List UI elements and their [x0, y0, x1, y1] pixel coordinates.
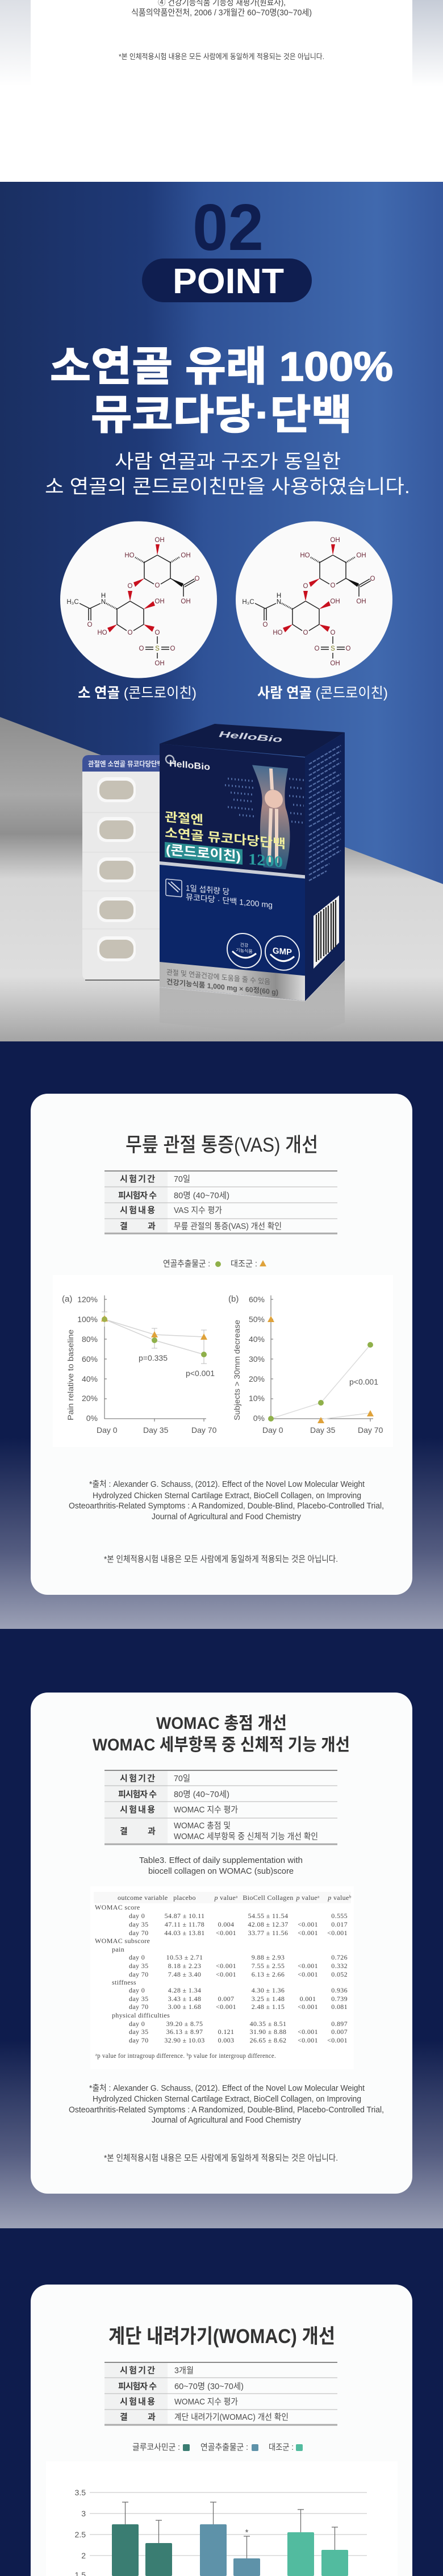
table: WOMAC scores: stiffness	[112, 1978, 136, 1986]
table: trial summary	[105, 2362, 337, 2425]
table: trial summary: 70일	[174, 1174, 190, 1184]
table: WOMAC scores: 10.53 ± 2.71	[166, 1953, 203, 1961]
product: blister pack	[82, 755, 168, 981]
table: trial summary: WOMAC 지수 평가	[174, 2397, 238, 2407]
table: WOMAC scores: ᵃp value for intragroup difference. ᵇp value for intergroup difference.	[95, 2052, 276, 2060]
table: WOMAC scores: p valueᵃ	[295, 1894, 320, 1902]
icon: human cartilage molecule: OH	[330, 598, 340, 605]
legend	[163, 1259, 266, 1269]
table: WOMAC scores: day 70	[129, 1970, 148, 1978]
table: WOMAC scores: 3.43 ± 1.48	[168, 1995, 201, 2003]
table: WOMAC scores: 4.28 ± 1.34	[168, 1986, 201, 1994]
chart a: pain relative to baseline: (a)	[62, 1294, 72, 1304]
chart b: subjects with decrease: 20%	[249, 1374, 265, 1383]
table: trial summary: WOMAC 세부항목 중 신체적 기능 개선 확인	[174, 1832, 318, 1841]
table: WOMAC scores: 4.30 ± 1.36	[252, 1986, 285, 1994]
chart a: pain relative to baseline: Pain relative to baseline	[66, 1329, 75, 1420]
table: WOMAC scores: day 35	[129, 1995, 148, 2003]
text block: source: Hydrolyzed Chicken Sternal Cartilage Extract, BioCell Collagen, on Improving	[93, 1491, 361, 1500]
panel: point 02 blue section	[0, 182, 443, 1041]
logo	[166, 755, 210, 772]
table: WOMAC scores: 0.004	[218, 1920, 234, 1928]
table: trial summary: 피시험자 수	[118, 1191, 157, 1201]
chart a: pain relative to baseline: Day 70	[191, 1425, 217, 1435]
icon: cow cartilage molecule: OH	[154, 660, 165, 667]
table: trial summary: 결과	[120, 1827, 156, 1836]
icon: cow cartilage molecule: O	[139, 645, 144, 652]
icon: cow cartilage molecule: O	[195, 576, 200, 582]
panel: WOMAC total section	[0, 1629, 443, 2228]
dosage info	[166, 879, 273, 910]
chart a: pain relative to baseline: p<0.001	[186, 1369, 215, 1378]
table: trial summary: 결과	[120, 1222, 156, 1231]
icon: human cartilage molecule	[236, 522, 392, 678]
text block: source: Hydrolyzed Chicken Sternal Cartilage Extract, BioCell Collagen, on Improving	[93, 2094, 361, 2104]
table: WOMAC scores: 36.13 ± 8.97	[166, 2028, 203, 2036]
bar chart: 3	[81, 2509, 86, 2518]
chart a: pain relative to baseline: Day 35	[143, 1425, 169, 1435]
badges: 기능식품	[236, 948, 253, 954]
icon: human cartilage molecule: O	[263, 622, 268, 628]
table: WOMAC scores: <0.001	[298, 2028, 318, 2036]
bar chart: 2.5	[75, 2530, 86, 2539]
legend: 대조군 :	[231, 1259, 257, 1269]
table: WOMAC scores: <0.001	[298, 1970, 318, 1978]
table: WOMAC scores: <0.001	[216, 1970, 236, 1978]
badge: POINT pill	[142, 259, 312, 302]
table: WOMAC scores	[90, 1886, 354, 2069]
bar chart: *	[245, 2528, 249, 2537]
chart b: subjects with decrease: 30%	[249, 1354, 265, 1364]
table: WOMAC scores: <0.001	[298, 2003, 318, 2011]
text: table caption: biocell collagen on WOMAC (sub)score	[148, 1866, 294, 1876]
table: WOMAC scores: day 0	[129, 1953, 145, 1961]
table: WOMAC scores: BioCell Collagen	[243, 1894, 294, 1902]
legend: 연골추출물군 :	[200, 2442, 248, 2452]
table: trial summary: WOMAC 총점 및	[174, 1821, 231, 1831]
table: trial summary: 시 험 내 용	[120, 1206, 155, 1215]
table: WOMAC scores: day 70	[129, 2036, 148, 2044]
table: WOMAC scores: day 70	[129, 1929, 148, 1937]
icon: human cartilage molecule: OH	[330, 660, 340, 667]
icon: cow cartilage molecule: H	[101, 593, 106, 599]
text block: subtitle: 소 연골의 콘드로이친만을 사용하였습니다.	[45, 476, 410, 498]
table: trial summary: 80명 (40~70세)	[174, 1790, 229, 1799]
product: supplement box	[160, 724, 345, 1001]
badges: GMP	[273, 946, 292, 957]
table: WOMAC scores: day 0	[129, 1986, 145, 1994]
icon: human cartilage molecule: S	[331, 645, 335, 652]
chart a: pain relative to baseline	[62, 1294, 217, 1435]
table: WOMAC scores: 2.48 ± 1.15	[252, 2003, 285, 2011]
table: WOMAC scores: WOMAC score	[95, 1903, 140, 1911]
icon: human cartilage molecule: O	[315, 645, 320, 652]
table: trial summary: 70일	[174, 1774, 190, 1783]
chart a: pain relative to baseline: 80%	[82, 1335, 98, 1344]
icon: human cartilage molecule: O	[331, 582, 336, 589]
icon: human cartilage molecule: OH	[356, 552, 366, 559]
icon: cow cartilage molecule: OH	[154, 537, 165, 544]
logo: HelloBio	[169, 758, 210, 772]
table: WOMAC scores: day 70	[129, 2003, 148, 2011]
heading: main title	[50, 344, 393, 438]
icon: cow cartilage molecule: N	[101, 599, 106, 606]
text block: source	[69, 1479, 384, 1522]
table: WOMAC scores: p valueᵃ	[214, 1894, 238, 1902]
chart b: subjects with decrease: 60%	[249, 1295, 265, 1304]
table: WOMAC scores: WOMAC subscore	[95, 1937, 150, 1945]
icon: cow cartilage molecule: HO	[97, 630, 107, 636]
heading: main title: 소연골 유래 100%	[50, 344, 393, 390]
table: WOMAC scores: 33.77 ± 11.56	[248, 1929, 288, 1937]
table: trial summary: 시 험 기 간	[120, 2366, 155, 2375]
table: trial summary	[105, 1770, 337, 1844]
icon: cow cartilage molecule: O	[128, 630, 133, 636]
floor	[0, 717, 443, 1041]
label: human cartilage: 사람 연골 (콘드로이친)	[257, 685, 388, 701]
badge: POINT pill: POINT	[173, 262, 284, 301]
panel: top clinical card remainder	[0, 0, 443, 86]
table: trial summary: 시 험 기 간	[120, 1174, 155, 1184]
table: WOMAC scores: pain	[112, 1945, 124, 1953]
product name: (콘드로이친)	[166, 842, 241, 864]
table: WOMAC scores: 0.726	[331, 1953, 348, 1961]
text block: source: *출처 : Alexander G. Schauss, (2012). Effect of the Novel Low Molecular Weight	[89, 2083, 365, 2093]
icon: human cartilage molecule: O	[331, 630, 336, 636]
table: trial summary: 무릎 관절의 통증(VAS) 개선 확인	[174, 1222, 282, 1231]
table: WOMAC scores: day 35	[129, 2028, 148, 2036]
table: WOMAC scores: 0.936	[331, 1986, 348, 1994]
table: WOMAC scores: 47.11 ± 11.78	[165, 1920, 204, 1928]
table: WOMAC scores: 0.739	[331, 1995, 348, 2003]
table: WOMAC scores: 3.00 ± 1.68	[168, 2003, 201, 2011]
icon: cow cartilage molecule: O	[155, 630, 160, 636]
table: WOMAC scores: <0.001	[298, 1929, 318, 1937]
icon: human cartilage molecule: H₃C	[242, 599, 254, 606]
chart a: pain relative to baseline: 100%	[77, 1315, 98, 1324]
icon: cow cartilage molecule: OH	[181, 552, 191, 559]
text block: source: Osteoarthritis-Related Symptoms : A Randomized, Double-Blind, Placebo-Controlled Trial,	[69, 1501, 384, 1511]
chart a: pain relative to baseline: 120%	[77, 1295, 98, 1304]
table: WOMAC scores: 8.18 ± 2.23	[168, 1962, 201, 1970]
product name	[165, 810, 286, 872]
badges	[227, 931, 299, 973]
table: trial summary: WOMAC 지수 평가	[174, 1805, 238, 1815]
table: WOMAC scores: outcome variable	[118, 1894, 168, 1902]
note: disclaimer: *본 인체적용시험 내용은 모든 사람에게 동일하게 적용되는 것은 아닙니다.	[104, 1554, 338, 1564]
table: WOMAC scores: day 35	[129, 1962, 148, 1970]
bottom strip text	[166, 968, 278, 997]
icon: human cartilage molecule: HO	[273, 630, 283, 636]
table: WOMAC scores: <0.001	[216, 1962, 236, 1970]
product name: 관절엔	[165, 810, 203, 827]
table: WOMAC scores: p valueᵇ	[327, 1894, 352, 1902]
box top face: HelloBio	[219, 730, 283, 745]
bottom strip text: 관절 및 연골건강에 도움을 줄 수 있음	[166, 968, 270, 986]
dot pattern	[225, 773, 304, 823]
table: WOMAC scores: 40.35 ± 8.51	[250, 2020, 286, 2028]
table: WOMAC scores: day 0	[129, 2020, 145, 2028]
label: cow cartilage: 소 연골 (콘드로이친)	[78, 685, 197, 701]
icon: cow cartilage molecule: O	[87, 622, 93, 628]
table: WOMAC scores: 54.87 ± 10.11	[165, 1912, 204, 1920]
table: trial summary: 계단 내려가기(WOMAC) 개선 확인	[174, 2412, 289, 2422]
table: WOMAC scores: 6.13 ± 2.66	[252, 1970, 285, 1978]
table: WOMAC scores: 39.20 ± 8.75	[166, 2020, 203, 2028]
table: WOMAC scores: 3.25 ± 1.48	[252, 1995, 285, 2003]
table: WOMAC scores: <0.001	[327, 1929, 348, 1937]
text block: source	[69, 2083, 384, 2125]
heading: 무릎 관절 통증(VAS) 개선	[126, 1134, 318, 1156]
bottom strip text: 건강기능식품 1,000 mg × 60정(60 g)	[166, 978, 278, 997]
text block: trial reference: 식품의약품안전처, 2006 / 3개월간 60~70명(30~70세)	[131, 8, 312, 18]
icon: human cartilage molecule: HO	[300, 552, 310, 559]
icon: human cartilage molecule: O	[370, 576, 375, 582]
table: WOMAC scores: placebo	[173, 1894, 196, 1902]
chart b: subjects with decrease: Subjects > 30mm decrease	[232, 1320, 241, 1420]
heading	[93, 1714, 350, 1754]
knee illustration	[252, 765, 290, 870]
icon: human cartilage molecule: O	[303, 630, 308, 636]
chart a: pain relative to baseline: 40%	[82, 1374, 98, 1383]
table: WOMAC scores: 0.017	[331, 1920, 348, 1928]
legend: 연골추출물군 :	[163, 1259, 210, 1269]
table: WOMAC scores: 0.052	[331, 1970, 348, 1978]
table: WOMAC scores: 0.001	[300, 1995, 316, 2003]
panel: VAS section	[0, 1041, 443, 1629]
icon: human cartilage molecule: O	[303, 583, 308, 590]
legend: 글루코사민군 :	[132, 2442, 180, 2452]
icon: human cartilage molecule: OH	[356, 598, 366, 605]
table: WOMAC scores: 0.007	[218, 1995, 234, 2003]
product: blister pack: 관절엔 소연골 뮤코다당단백	[88, 760, 163, 768]
table: trial summary: 시 험 기 간	[120, 1774, 155, 1783]
chart a: pain relative to baseline: p=0.335	[139, 1353, 168, 1362]
table: trial summary: 시 험 내 용	[120, 1805, 155, 1815]
chart b: subjects with decrease: 50%	[249, 1315, 265, 1324]
text block: subtitle: 사람 연골과 구조가 동일한	[115, 451, 341, 473]
table: WOMAC scores: <0.001	[216, 1929, 236, 1937]
heading: main title: 뮤코다당·단백	[91, 393, 352, 438]
chart b: subjects with decrease: Day 0	[262, 1425, 283, 1435]
table: WOMAC scores: 26.65 ± 8.62	[250, 2036, 286, 2044]
table: trial summary: VAS 지수 평가	[174, 1206, 222, 1215]
table: WOMAC scores: 7.55 ± 2.55	[252, 1962, 285, 1970]
table: WOMAC scores: 0.007	[331, 2028, 348, 2036]
product name: 1200	[248, 851, 283, 872]
chart a: pain relative to baseline: Day 0	[97, 1425, 118, 1435]
table: WOMAC scores: 0.555	[331, 1912, 348, 1920]
table: trial summary: 3개월	[174, 2366, 194, 2375]
product: box reflection	[160, 961, 345, 1037]
icon: cow cartilage molecule: S	[155, 645, 160, 652]
table: WOMAC scores: 0.897	[331, 2020, 348, 2028]
box side face	[305, 732, 345, 1001]
chart b: subjects with decrease: 40%	[249, 1335, 265, 1344]
chart b: subjects with decrease: 0%	[253, 1414, 265, 1423]
heading: WOMAC 세부항목 중 신체적 기능 개선	[93, 1736, 350, 1754]
icon: cow cartilage molecule: H₃C	[66, 599, 79, 606]
table: WOMAC scores: 7.48 ± 3.40	[168, 1970, 201, 1978]
chart b: subjects with decrease	[228, 1294, 383, 1435]
table: WOMAC scores: 0.081	[331, 2003, 348, 2011]
table: trial summary: 시 험 내 용	[120, 2397, 155, 2407]
chart a: pain relative to baseline: 0%	[86, 1414, 98, 1423]
bar chart	[46, 2461, 398, 2576]
table: WOMAC scores: day 35	[129, 1920, 148, 1928]
icon: cow cartilage molecule: HO	[124, 552, 135, 559]
number 02: 02	[193, 190, 264, 264]
icon: human cartilage molecule: O	[346, 645, 351, 652]
heading: WOMAC 총점 개선	[156, 1714, 287, 1733]
table: WOMAC scores: 32.90 ± 10.03	[164, 2036, 205, 2044]
table: WOMAC scores: day 0	[129, 1912, 145, 1920]
table: WOMAC scores: 0.332	[331, 1962, 348, 1970]
table: trial summary: 피시험자 수	[118, 1790, 157, 1799]
chart b: subjects with decrease: (b)	[228, 1294, 239, 1304]
text block: source: *출처 : Alexander G. Schauss, (2012). Effect of the Novel Low Molecular Weight	[89, 1479, 365, 1489]
table: trial summary: 80명 (40~70세)	[174, 1191, 229, 1201]
icon: cow cartilage molecule: O	[128, 583, 133, 590]
table: WOMAC scores: 0.003	[218, 2036, 234, 2044]
table: WOMAC scores: <0.001	[327, 2036, 348, 2044]
text: table caption: Table3. Effect of daily supplementation with	[139, 1856, 303, 1865]
text block: source: Osteoarthritis-Related Symptoms : A Randomized, Double-Blind, Placebo-Controlled Trial,	[69, 2105, 384, 2115]
icon: human cartilage molecule: H	[277, 593, 281, 599]
table: trial summary: 결과	[120, 2412, 156, 2422]
table: WOMAC scores: 44.03 ± 13.81	[164, 1929, 205, 1937]
chart b: subjects with decrease: p<0.001	[349, 1377, 378, 1386]
text block: source: Journal of Agricultural and Food Chemistry	[152, 1512, 301, 1522]
heading: 계단 내려가기(WOMAC) 개선	[108, 2325, 335, 2348]
note: disclaimer: *본 인체적용시험 내용은 모든 사람에게 동일하게 적용되는 것은 아닙니다.	[119, 52, 324, 61]
dosage info: 1일 섭취량 당	[186, 883, 229, 897]
icon: human cartilage molecule: OH	[330, 537, 340, 544]
chart a: pain relative to baseline: 60%	[82, 1354, 98, 1364]
icon: cow cartilage molecule: OH	[154, 598, 165, 605]
table: WOMAC scores: 54.55 ± 11.54	[248, 1912, 288, 1920]
table: WOMAC scores: <0.001	[298, 1920, 318, 1928]
table: trial summary: 피시험자 수	[118, 2382, 157, 2391]
box front face	[160, 744, 305, 1001]
text block: subtitle	[45, 451, 410, 498]
icon: cow cartilage molecule: OH	[181, 598, 191, 605]
badges: 건강	[240, 941, 249, 948]
icon: cow cartilage molecule	[60, 522, 217, 678]
table: trial summary: 60~70명 (30~70세)	[174, 2382, 244, 2391]
table: WOMAC scores: physical difficulties	[112, 2011, 170, 2019]
table: WOMAC scores: 31.90 ± 8.88	[250, 2028, 286, 2036]
legend: 대조군 :	[269, 2442, 294, 2452]
text block: source: Journal of Agricultural and Food Chemistry	[152, 2115, 301, 2125]
icon: cow cartilage molecule: O	[170, 645, 175, 652]
table: trial summary	[105, 1171, 337, 1233]
icon: cow cartilage molecule: O	[155, 582, 160, 589]
table: WOMAC scores: 9.88 ± 2.93	[252, 1953, 285, 1961]
chart a: pain relative to baseline: 20%	[82, 1394, 98, 1403]
legend	[132, 2442, 303, 2452]
bar chart: 3.5	[75, 2488, 86, 2497]
icon: human cartilage molecule: N	[277, 599, 281, 606]
table: WOMAC scores: <0.001	[298, 1962, 318, 1970]
table: WOMAC scores: 42.08 ± 12.37	[248, 1920, 289, 1928]
chart panel	[53, 1275, 393, 1447]
table: WOMAC scores: <0.001	[216, 2003, 236, 2011]
table: WOMAC scores: <0.001	[298, 2036, 318, 2044]
bar chart: 2	[81, 2551, 86, 2560]
box top face	[160, 724, 345, 757]
product name: 소연골 뮤코다당단백	[165, 826, 286, 851]
chart b: subjects with decrease: 10%	[249, 1394, 265, 1403]
note: disclaimer: *본 인체적용시험 내용은 모든 사람에게 동일하게 적용되는 것은 아닙니다.	[104, 2153, 338, 2163]
text block: trial reference	[131, 0, 312, 18]
text: table caption	[139, 1856, 303, 1876]
panel: stair descent section	[0, 2228, 443, 2576]
table: WOMAC scores: 0.121	[218, 2028, 234, 2036]
dosage info: 뮤코다당 · 단백 1,200 mg	[186, 892, 273, 910]
chart b: subjects with decrease: Day 35	[310, 1425, 336, 1435]
chart b: subjects with decrease: Day 70	[358, 1425, 383, 1435]
